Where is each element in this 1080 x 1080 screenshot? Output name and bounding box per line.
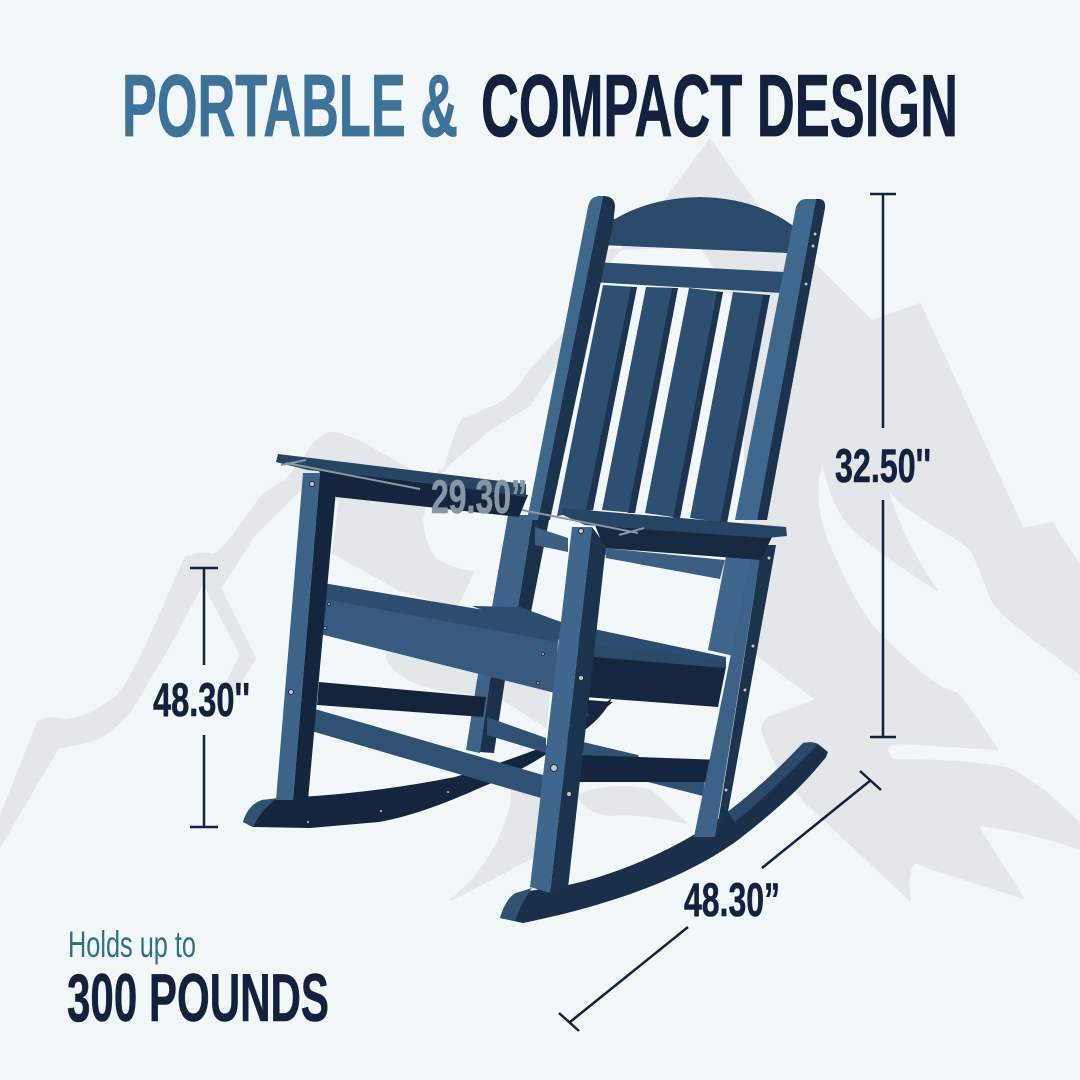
chair rear rocker xyxy=(243,698,612,828)
dimension: height 32.50 inches xyxy=(835,194,931,737)
chair lower stretchers xyxy=(301,682,722,798)
chair seat xyxy=(308,582,726,707)
weight capacity callout xyxy=(67,924,329,1036)
dimension: seat height 48.30 inches xyxy=(153,568,250,827)
chair front rocker xyxy=(500,742,828,923)
chair right rear leg xyxy=(694,545,776,837)
chair left front leg xyxy=(276,473,336,800)
chair right front leg xyxy=(530,527,606,893)
chair rivets xyxy=(288,232,817,824)
dimension: depth 48.30 inches: 48.30” xyxy=(684,873,780,926)
rocking chair xyxy=(243,196,828,923)
weight capacity callout: 300 POUNDS xyxy=(67,960,329,1036)
chair back slats xyxy=(557,285,770,523)
dimension: height 32.50 inches: 32.50'' xyxy=(835,439,931,492)
chair right arm xyxy=(535,508,787,579)
width dimension overlay: 29.30 inches: 29.30” xyxy=(431,470,527,523)
title: PORTABLE & xyxy=(122,56,458,155)
chair right back post xyxy=(735,199,825,520)
dimension: seat height 48.30 inches: 48.30'' xyxy=(153,673,250,726)
chair crest rail xyxy=(600,197,795,253)
weight capacity callout: Holds up to xyxy=(68,924,196,965)
background: mountain silhouette xyxy=(0,140,1080,900)
chair rear legs xyxy=(466,515,762,753)
chair left arm xyxy=(276,454,528,517)
width dimension overlay: 29.30 inches xyxy=(281,460,644,535)
chair left back post xyxy=(527,196,615,520)
chair second rail xyxy=(590,262,784,293)
dimension: depth 48.30 inches xyxy=(559,771,881,1031)
